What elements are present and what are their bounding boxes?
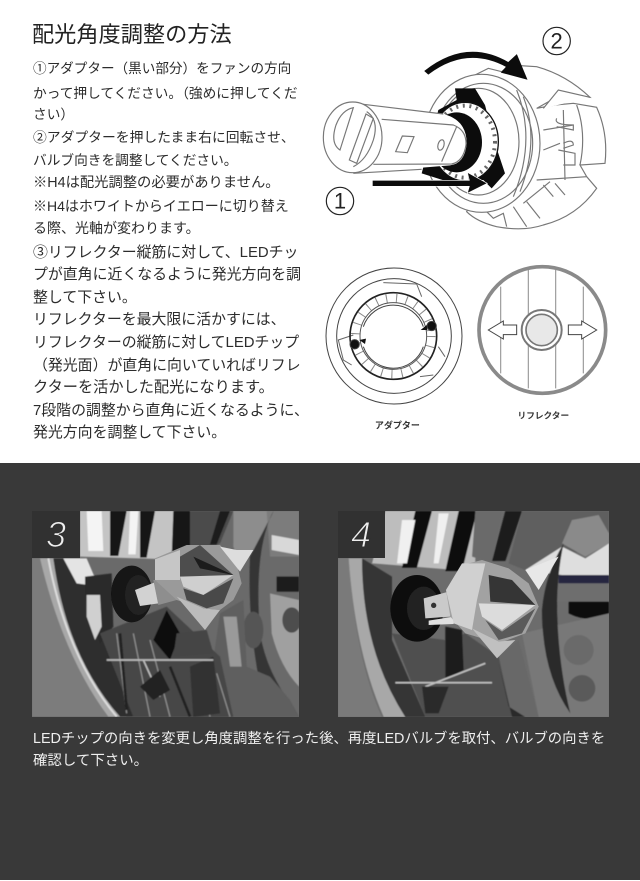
photo 3 [32,511,299,717]
text block: instructions: さい） [33,107,74,122]
dark panel [0,463,640,880]
text block: final note: LEDチップの向きを変更し角度調整を行った後、再度LEDバルブを取付、バルブの向きを [33,731,605,747]
number 1 [326,187,354,215]
icon: LED bulb [323,102,467,173]
text block: instructions: プが直角に近くなるように発光方向を調 [33,267,301,283]
text block: instructions: ③リフレクター縦筋に対して、LEDチッ [33,245,298,261]
icon: black adapter [422,88,505,188]
icon: heat sink fan [467,65,606,229]
text block: instructions: 発光方向を調整して下さい。 [33,425,226,441]
text block: instructions: 整して下さい。 [33,290,137,306]
diagram: adapter and reflector [326,264,608,431]
text block: instructions: リフレクターを最大限に活かすには、 [33,312,286,328]
diagram: bulb adapter rotation [322,26,606,230]
text block: instructions: かって押してください。（強めに押してくだ [33,86,298,101]
number tag 4 [338,511,385,558]
number 2 [543,27,570,55]
text block: final note: 確認して下さい。 [33,753,148,769]
text block: instructions: 7段階の調整から直角に近くなるように、 [33,403,309,419]
photo 4 [338,511,609,717]
number 2: 2 [551,29,563,54]
text block: instructions: る際、光軸が変わります。 [33,220,200,236]
arrow: rotate clockwise [425,52,527,79]
number tag 4: 4 [351,514,371,555]
text block: instructions: バルブ向きを調整してください。 [33,153,238,168]
label: reflector: リフレクター [518,410,569,421]
text block: instructions: クターを活かした配光になります。 [33,379,274,396]
text block: instructions [33,61,309,441]
icon: adapter front view [326,268,462,404]
text block: instructions: （発光面）が直角に向いていればリフレ [33,358,301,374]
number tag 3 [32,511,80,558]
text block: final note [33,730,605,769]
text block: instructions: リフレクターの縦筋に対してLEDチップ [33,335,299,351]
text block: instructions: ①アダプター（黒い部分）をファンの方向 [33,61,291,76]
text block: instructions: ②アダプターを押したまま右に回転させ、 [33,130,295,145]
text block: instructions: ※H4は配光調整の必要がありません。 [33,175,280,191]
arrow: push right [372,172,487,193]
title: 配光角度調整の方法 [32,22,232,47]
icon: reflector front view [479,267,606,393]
text block: instructions: ※H4はホワイトからイエローに切り替え [33,198,289,214]
icon: collar rings [423,74,540,212]
number tag 3: 3 [46,514,66,555]
label: adapter: アダプター [375,420,420,431]
number 1: 1 [334,189,346,214]
